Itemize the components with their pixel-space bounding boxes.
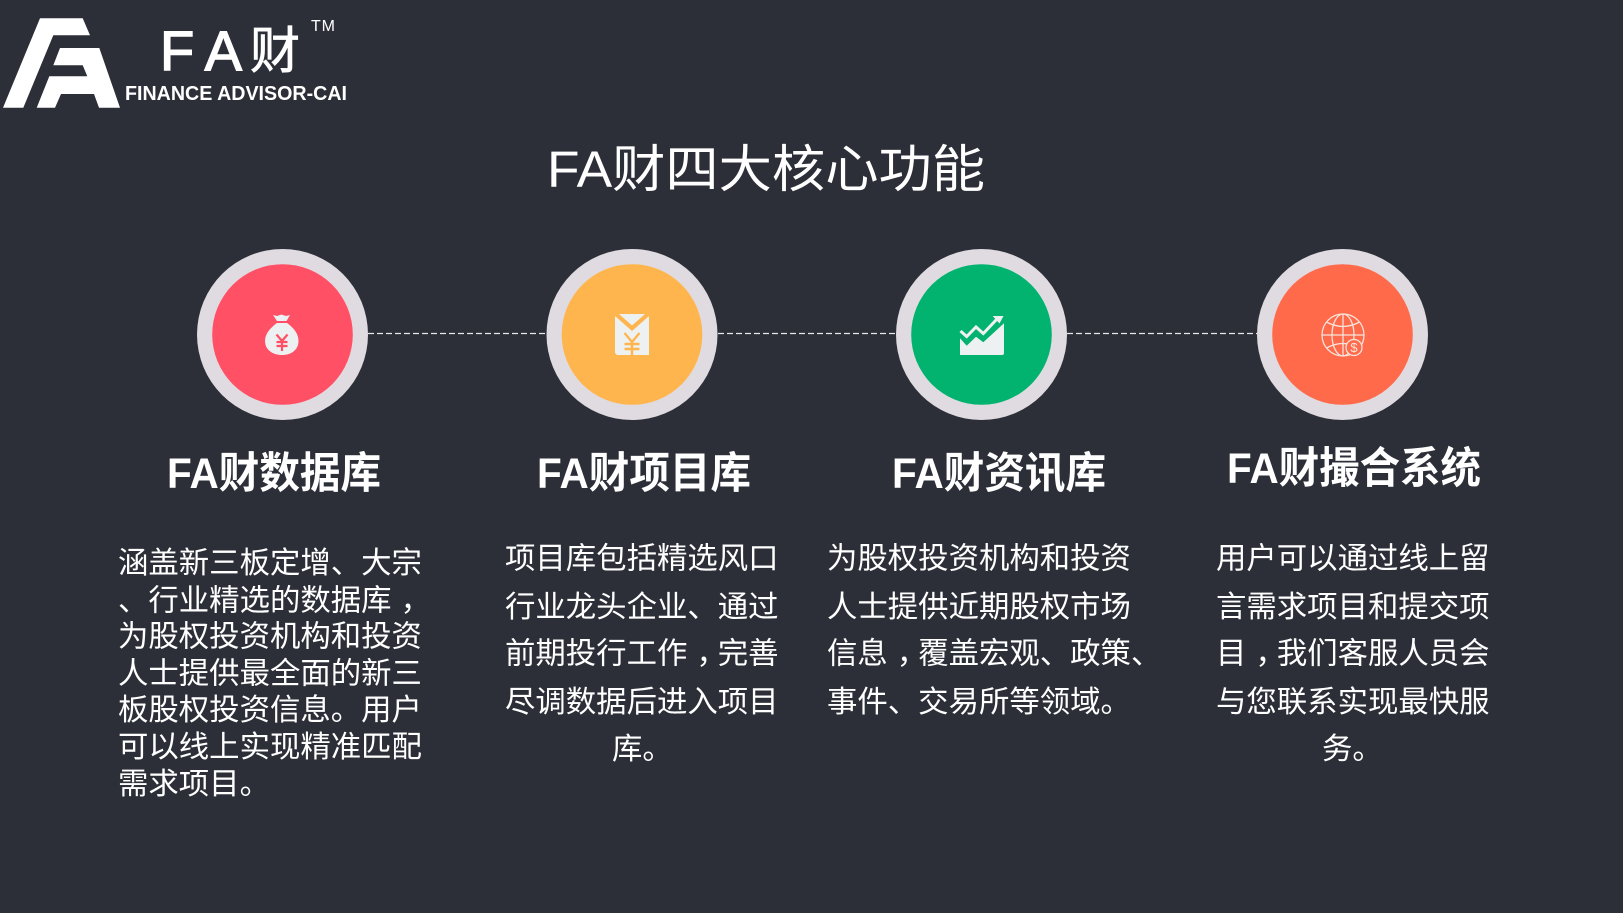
description xyxy=(505,542,779,766)
description xyxy=(1216,542,1490,766)
panel: FA财项目库 xyxy=(505,249,779,766)
description: 前期投行工作 ，完善 xyxy=(505,636,779,670)
heading: FA财项目库 xyxy=(537,450,751,498)
description: 为股权投资机构和投资 xyxy=(118,620,422,654)
description: 言需求项目和提交项 xyxy=(1216,590,1490,624)
description: 为股权投资机构和投资 xyxy=(827,542,1131,576)
description: 目 ，我们客服人员会 xyxy=(1216,636,1490,670)
heading: FA财数据库 xyxy=(167,450,381,498)
description: 行业龙头企业、通过 xyxy=(505,590,779,624)
badge: coral circle xyxy=(1257,249,1428,420)
description xyxy=(118,546,431,801)
panel: FA财撮合系统 xyxy=(1216,249,1490,766)
icon: money bag xyxy=(265,314,298,355)
logo xyxy=(3,18,347,108)
panel: FA财资讯库 xyxy=(827,249,1161,719)
trademark: TM xyxy=(311,18,335,35)
description: 项目库包括精选风口 xyxy=(505,542,779,576)
badge: orange circle xyxy=(546,249,718,420)
description: 人士提供最全面的新三 xyxy=(118,656,422,690)
description: 板股权投资信息。用户 xyxy=(118,693,422,727)
icon: globe with dollar coin xyxy=(1322,314,1364,356)
description: 人士提供近期股权市场 xyxy=(827,590,1131,624)
description: 涵盖新三板定增、大宗 xyxy=(118,546,422,580)
logo mark: FA monogram xyxy=(3,18,120,108)
description: 事件、交易所等领域。 xyxy=(827,685,1131,719)
badge: green circle xyxy=(896,249,1067,420)
heading: FA财资讯库 xyxy=(892,450,1106,498)
title: FA财四大核心功能 xyxy=(547,141,985,198)
heading: FA财撮合系统 xyxy=(1227,445,1481,493)
logo tagline: FINANCE ADVISOR-CAI xyxy=(125,83,347,105)
connector: projects to news xyxy=(718,332,896,334)
description: 、行业精选的数据库 ， xyxy=(118,584,431,618)
description: 库。 xyxy=(612,732,673,766)
description: 可以线上实现精准匹配 xyxy=(118,730,422,764)
badge: red circle xyxy=(197,249,368,420)
description xyxy=(827,542,1161,719)
description: 用户可以通过线上留 xyxy=(1216,542,1490,576)
connector: news to matching xyxy=(1067,332,1257,334)
description: 与您联系实现最快服 xyxy=(1216,685,1490,719)
logo character: 财 xyxy=(250,23,300,79)
panel: FA财数据库 xyxy=(118,249,431,801)
description: 信息 ，覆盖宏观、政策、 xyxy=(827,636,1161,670)
icon: red envelope with yen xyxy=(615,314,649,355)
description: 尽调数据后进入项目 xyxy=(505,685,779,719)
description: 需求项目。 xyxy=(118,767,270,801)
connector: database to projects xyxy=(368,332,546,334)
icon: globe with dollar coin: $ xyxy=(1350,340,1358,355)
description: 务。 xyxy=(1322,732,1383,766)
icon: rising chart xyxy=(960,316,1004,355)
logo wordmark: FA xyxy=(160,19,243,82)
